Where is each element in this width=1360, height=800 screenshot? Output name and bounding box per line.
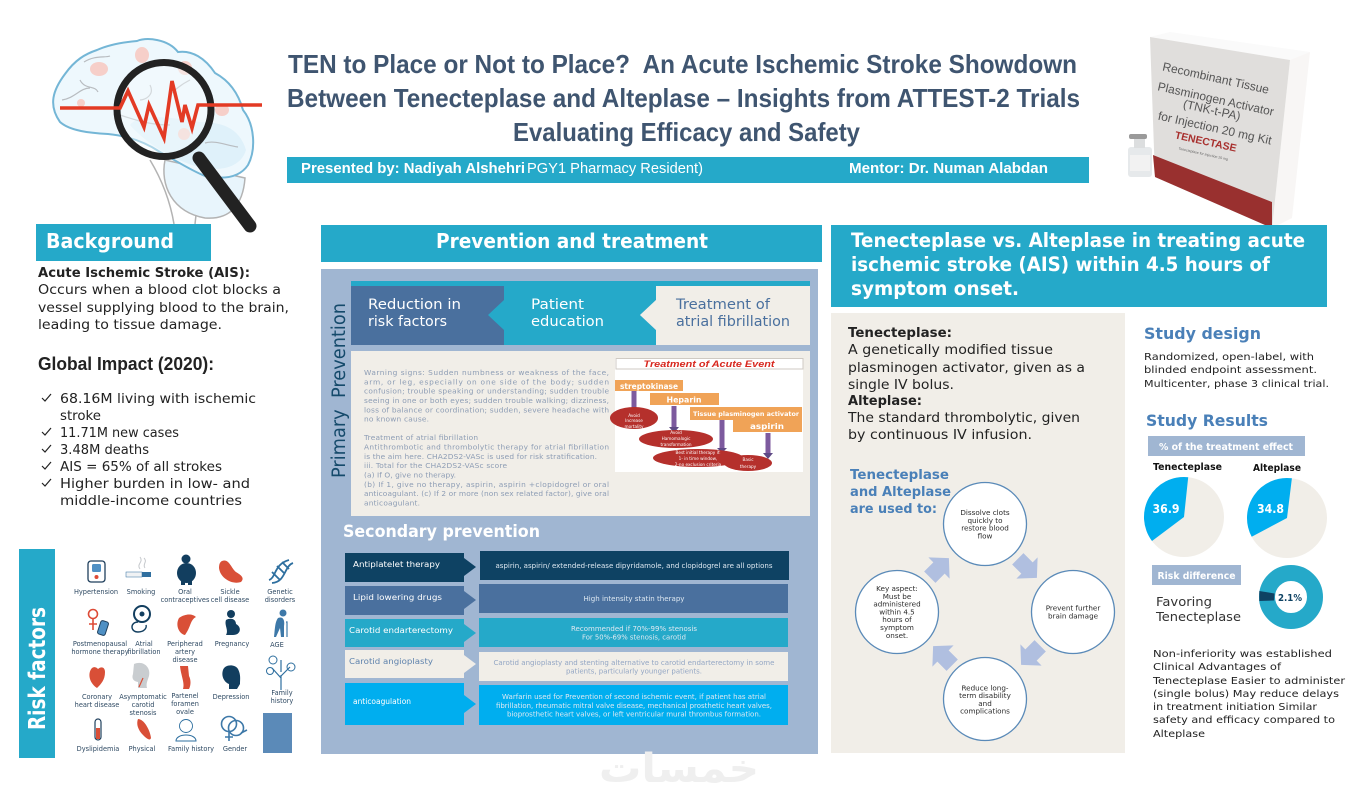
chart: treatment of acute event: Hamomalogic bbox=[662, 436, 691, 441]
circle: reduce disability: and bbox=[978, 699, 992, 708]
icon: family history tree: Family bbox=[271, 689, 293, 697]
primary prevention text box: iii. Total for the CHA2DS2-VASc score bbox=[364, 461, 507, 470]
image: Tenectase medicine box and vial: Plasminogen Activator bbox=[1156, 79, 1275, 119]
circle: key aspect: within 4.5 bbox=[879, 608, 915, 616]
text block: global impact bbox=[38, 354, 256, 509]
panel: prevention bbox=[321, 269, 818, 754]
circle: key aspect: symptom bbox=[880, 623, 914, 632]
icon: oral contraceptives: contraceptives bbox=[161, 596, 210, 604]
row: carotid endarterectomy bbox=[345, 618, 788, 647]
text block: conclusions: Alteplase bbox=[1153, 729, 1205, 740]
icon: pregnancy: Pregnancy bbox=[215, 640, 249, 648]
chart: treatment of acute event: Tissue plasminogen activator bbox=[693, 411, 800, 418]
primary prevention tabs: Treatment of bbox=[675, 297, 771, 313]
text block: drug definitions: plasminogen activator, given as a bbox=[848, 360, 1085, 376]
icon: peripheral artery disease: Peripherad bbox=[167, 640, 203, 648]
label: risk difference: Risk difference bbox=[1158, 571, 1236, 582]
icon: atrial fibrillation bbox=[127, 606, 161, 656]
row: lipid lowering drugs bbox=[345, 584, 788, 615]
row: anticoagulation: bioprosthetic heart valves, or left ventricular mural thrombus formation. bbox=[507, 710, 761, 718]
icon: family history tree: history bbox=[271, 697, 293, 705]
chart: treatment of acute event: transformation bbox=[660, 442, 692, 447]
icon: oral contraceptives bbox=[161, 554, 210, 604]
chart: treatment of acute event: aspirin bbox=[750, 422, 784, 431]
primary prevention text box: (b) If 1, give no therapy, aspirin, aspirin +clopidogrel or oral bbox=[364, 480, 609, 489]
circle: prevent brain damage bbox=[1032, 570, 1114, 654]
heading: used to: Tenecteplase bbox=[850, 467, 949, 483]
chart: treatment of acute event: Best initial therapy if: bbox=[676, 450, 720, 455]
icon: gender: Gender bbox=[223, 745, 247, 753]
heading: prevention and treatment bbox=[321, 225, 822, 262]
label: risk difference bbox=[1152, 565, 1241, 585]
primary prevention text box: is the aim here. CHA2DS2-VASc is used for risk stratification. bbox=[364, 452, 597, 461]
arrow: left to top bbox=[919, 547, 960, 588]
text block: conclusions: Clinical Advantages of bbox=[1153, 662, 1282, 673]
chart: treatment of acute event: Avoid bbox=[670, 430, 682, 435]
row: carotid endarterectomy: Recommended if 70%-99% stenosis bbox=[571, 625, 697, 633]
row: carotid angioplasty: Carotid angioplasty bbox=[349, 657, 433, 666]
icon: patent foramen ovale: ovale bbox=[176, 708, 194, 716]
circle: dissolve clots bbox=[944, 482, 1026, 566]
panel: drug comparison bbox=[831, 313, 1125, 753]
arrow: bottom to left bbox=[922, 635, 963, 676]
row: antiplatelet therapy bbox=[345, 551, 789, 582]
icon: depression: Depression bbox=[213, 693, 249, 701]
icon: physical inactivity: Physical bbox=[129, 745, 156, 753]
chart: treatment of acute event: 1- in time window, bbox=[679, 456, 717, 461]
pie chart: alteplase 34.8: Alteplase bbox=[1253, 463, 1301, 474]
image: Tenectase medicine box and vial: TENECTASE bbox=[1174, 129, 1238, 155]
image: Tenectase medicine box and vial bbox=[1128, 32, 1310, 228]
chart: treatment of acute event: Treatment of Acute Event bbox=[644, 359, 775, 370]
primary prevention text box: loss of balance or coordination; sudden, severe headache with bbox=[364, 405, 609, 414]
icon: peripheral artery disease: artery bbox=[175, 648, 195, 656]
icon: family history group bbox=[168, 720, 214, 753]
image: Tenectase medicine box and vial: Tenecteplase for Injection 20 mg bbox=[1178, 147, 1228, 161]
text block: drug definitions: The standard thrombolytic, given bbox=[847, 410, 1080, 426]
text block: drug definitions: single IV bolus. bbox=[848, 377, 954, 393]
pie chart: alteplase 34.8 bbox=[1247, 463, 1327, 558]
text block: global impact: 11.71M new cases bbox=[60, 425, 179, 441]
image: Tenectase medicine box and vial: (TNK-t-PA) bbox=[1182, 97, 1242, 123]
heading: used to bbox=[850, 467, 951, 517]
icon: sickle cell disease: cell disease bbox=[211, 596, 249, 604]
icon: asymptomatic carotid stenosis: carotid bbox=[132, 701, 154, 709]
row: carotid angioplasty: patients, particularly younger patients. bbox=[566, 668, 702, 676]
primary prevention text box: anticoagulant. bbox=[364, 498, 420, 508]
icon: age: AGE bbox=[270, 641, 284, 649]
heading: tenecteplase vs alteplase bbox=[831, 225, 1327, 307]
presenter and mentor bar: Presented by: Nadiyah Alshehri bbox=[301, 160, 525, 177]
arrow: top to right bbox=[1007, 548, 1048, 589]
icon: depression bbox=[213, 665, 249, 701]
circle: reduce disability: term disability bbox=[959, 691, 1012, 700]
circle: reduce disability: Reduce long- bbox=[962, 684, 1009, 692]
circle: reduce disability bbox=[944, 658, 1026, 740]
circle: key aspect bbox=[856, 570, 938, 654]
text block: global impact: AIS = 65% of all strokes bbox=[60, 459, 222, 475]
icon: physical inactivity bbox=[129, 719, 156, 753]
primary prevention tabs: education bbox=[531, 314, 604, 330]
icon: gender bbox=[222, 716, 247, 753]
icon: smoking: Smoking bbox=[127, 588, 155, 596]
label: treatment effect bbox=[1148, 436, 1305, 456]
chart: treatment of acute event: 2-no exclusion criteria bbox=[675, 462, 722, 467]
text block: drug definitions: A genetically modified tissue bbox=[848, 342, 1053, 358]
row: anticoagulation: fibrillation, rheumatic mitral valve disease, mechanical prosthetic heart valves, bbox=[496, 702, 772, 710]
donut chart: 2.1 percent bbox=[1259, 573, 1315, 621]
icon: genetic disorders bbox=[265, 560, 296, 604]
primary prevention text box: Warning signs: Sudden numbness or weakness of the face, bbox=[364, 368, 609, 377]
text block: conclusions: (single bolus) May reduce delays bbox=[1153, 689, 1339, 700]
risk factors side label: Risk factors bbox=[25, 607, 51, 730]
primary prevention tabs: atrial fibrillation bbox=[676, 314, 790, 330]
icon: family history group: Family history bbox=[168, 745, 214, 753]
icon: asymptomatic carotid stenosis: Asymptomatic bbox=[119, 693, 167, 701]
primary prevention tabs: Patient bbox=[531, 297, 585, 313]
primary prevention tabs bbox=[351, 281, 810, 345]
risk factors side label bbox=[19, 549, 55, 758]
icon: pregnancy bbox=[215, 610, 249, 648]
text: favoring tenecteplase bbox=[1155, 594, 1241, 624]
arrow: right to bottom bbox=[1010, 635, 1051, 676]
primary prevention text box: Antithrombotic and thrombolytic therapy for atrial fibrillation bbox=[364, 442, 609, 452]
chart: treatment of acute event: Heparin bbox=[666, 396, 702, 404]
icon: patent foramen ovale bbox=[171, 666, 199, 716]
primary prevention tabs: risk factors bbox=[368, 314, 447, 330]
label: treatment effect: % of the treatment effect bbox=[1159, 442, 1293, 453]
primary prevention text box: seeing in one or both eyes; sudden trouble walking; dizziness, bbox=[364, 396, 609, 405]
row: antiplatelet therapy: aspirin, aspirin/ extended-release dipyridamole, and clopidogrel are all options bbox=[496, 562, 773, 570]
icon: dyslipidemia bbox=[77, 719, 119, 753]
icon: coronary heart disease: Coronary bbox=[82, 693, 112, 701]
heading: prevention and treatment: Prevention and treatment bbox=[436, 229, 708, 253]
row: carotid angioplasty: Carotid angioplasty and stenting alternative to carotid endarterectomy in some bbox=[494, 659, 774, 667]
section: study design: Multicenter, phase 3 clinical trial. bbox=[1144, 379, 1329, 390]
text block: drug definitions: by continuous IV infusion. bbox=[848, 427, 1032, 443]
section: study results bbox=[1144, 411, 1346, 740]
chart: treatment of acute event: Avoid bbox=[628, 413, 640, 418]
pie chart: tenecteplase 36.9 bbox=[1144, 462, 1224, 557]
primary prevention text box: confusion; trouble speaking or understanding; sudden trouble bbox=[364, 387, 609, 396]
pie chart: tenecteplase 36.9: Tenecteplase bbox=[1153, 462, 1222, 473]
text block: global impact: Global Impact (2020): bbox=[38, 354, 214, 374]
panel: risk factors bbox=[19, 549, 296, 758]
primary prevention tabs: Reduction in bbox=[368, 297, 461, 313]
heading: Background: Background bbox=[46, 229, 174, 253]
text block: conclusions: Tenecteplase Easier to administer bbox=[1152, 676, 1346, 687]
section: study design: Randomized, open-label, with bbox=[1144, 352, 1314, 363]
title: Between Tenecteplase and Alteplase – Insights from ATTEST-2 Trials bbox=[287, 83, 1080, 113]
blue square placeholder bbox=[263, 713, 292, 753]
chart: treatment of acute event bbox=[610, 358, 803, 472]
primary prevention text box: (a) If O, give no therapy. bbox=[364, 470, 456, 480]
icon: family history tree bbox=[266, 656, 295, 705]
circle: key aspect: Must be bbox=[883, 592, 912, 601]
text block: global impact: 68.16M living with ischemic bbox=[60, 391, 256, 407]
chart: treatment of acute event: mortality bbox=[624, 424, 644, 429]
text: favoring tenecteplase: Favoring bbox=[1156, 594, 1212, 609]
icon: postmenopausal hormone therapy bbox=[71, 610, 129, 656]
title bbox=[287, 49, 1080, 147]
text block: conclusions: in treatment initiation Similar bbox=[1153, 702, 1318, 713]
icon: peripheral artery disease bbox=[167, 614, 203, 664]
circle: key aspect: hours of bbox=[882, 615, 912, 624]
icon: patent foramen ovale: Partenel bbox=[171, 692, 199, 700]
text block: drug definitions bbox=[847, 325, 1085, 443]
text block: acute ischemic stroke definition: leading to tissue damage. bbox=[38, 317, 222, 333]
row: lipid lowering drugs: Lipid lowering drugs bbox=[353, 593, 442, 602]
icon: sickle cell disease: Sickle bbox=[220, 588, 240, 596]
heading: Background bbox=[36, 224, 211, 261]
circle: dissolve clots: restore blood bbox=[961, 524, 1009, 532]
icon: postmenopausal hormone therapy: hormone therapy bbox=[71, 648, 129, 656]
text block: acute ischemic stroke definition bbox=[38, 265, 289, 333]
chart: treatment of acute event: streptokinase bbox=[620, 382, 678, 391]
row: carotid endarterectomy: For 50%-69% stenosis, carotid bbox=[582, 634, 686, 642]
icon: patent foramen ovale: foramen bbox=[171, 700, 199, 708]
section: study design: Study design bbox=[1144, 324, 1261, 343]
heading: used to: and Alteplase bbox=[850, 484, 951, 500]
icon: atrial fibrillation: fibrillation bbox=[127, 648, 161, 656]
circle: key aspect: administered bbox=[873, 600, 921, 608]
text block: conclusions: safety and efficacy compared to bbox=[1153, 715, 1335, 726]
title: Evaluating Efficacy and Safety bbox=[513, 117, 860, 147]
icon: genetic disorders: Genetic bbox=[267, 588, 293, 596]
circle: key aspect: onset. bbox=[886, 631, 908, 640]
text block: acute ischemic stroke definition: Occurs when a blood clot blocks a bbox=[38, 282, 281, 298]
row: anticoagulation: Warfarin used for Prevention of second ischemic event, if patient has atrial bbox=[502, 693, 766, 701]
icon: sickle cell disease bbox=[211, 560, 249, 604]
presenter and mentor bar: PGY1 Pharmacy Resident) bbox=[527, 160, 703, 177]
icon: smoking bbox=[126, 557, 155, 596]
icon: asymptomatic carotid stenosis bbox=[119, 663, 167, 717]
section: study design: blinded endpoint assessment. bbox=[1144, 365, 1317, 376]
icon: dyslipidemia: Dyslipidemia bbox=[77, 745, 119, 753]
icon: age bbox=[270, 610, 287, 649]
primary prevention text box: no known cause. bbox=[364, 415, 429, 424]
icon: oral contraceptives: Oral bbox=[178, 588, 192, 596]
icon: hypertension: Hypertension bbox=[74, 588, 118, 596]
primary prevention vertical label: Primary Prevention bbox=[329, 303, 350, 478]
image: Tenectase medicine box and vial: Recombinant Tissue bbox=[1161, 59, 1271, 97]
row: lipid lowering drugs: High intensity statin therapy bbox=[584, 595, 684, 603]
circle: dissolve clots: Dissolve clots bbox=[960, 508, 1010, 517]
circle: key aspect: Key aspect: bbox=[876, 584, 918, 593]
row: antiplatelet therapy: Antiplatelet therapy bbox=[353, 560, 440, 569]
text block: drug definitions: Alteplase: bbox=[848, 393, 922, 409]
text block: global impact: Higher burden in low- and bbox=[60, 476, 250, 492]
circle: prevent brain damage: brain damage bbox=[1048, 612, 1099, 620]
icon: coronary heart disease bbox=[75, 667, 119, 709]
chart: treatment of acute event: Basic bbox=[742, 457, 754, 462]
pie chart: tenecteplase 36.9: 36.9 bbox=[1152, 501, 1180, 516]
heading: study results: Study Results bbox=[1146, 411, 1268, 430]
pie chart: alteplase 34.8: 34.8 bbox=[1257, 501, 1284, 516]
presenter and mentor bar: Mentor: Dr. Numan Alabdan bbox=[849, 160, 1048, 177]
title: TEN to Place or Not to Place? An Acute Ischemic Stroke Showdown bbox=[288, 49, 1077, 79]
heading: secondary prevention: Secondary prevention bbox=[343, 522, 540, 541]
row: carotid angioplasty bbox=[345, 650, 788, 681]
primary prevention text box: Treatment of atrial fibrillation bbox=[363, 433, 478, 442]
icon: brain with magnifying glass bbox=[53, 39, 262, 226]
text: favoring tenecteplase: Tenecteplase bbox=[1155, 609, 1241, 624]
text block: global impact: middle-income countries bbox=[60, 493, 242, 509]
primary prevention text box bbox=[351, 351, 810, 516]
icon: hypertension bbox=[74, 561, 118, 596]
watermark: خمسات bbox=[599, 746, 759, 792]
heading: tenecteplase vs alteplase: ischemic stroke (AIS) within 4.5 hours of bbox=[851, 253, 1270, 276]
section: study design bbox=[1144, 324, 1329, 390]
circle: dissolve clots: flow bbox=[978, 532, 993, 540]
text block: conclusions: Non-inferiority was established bbox=[1153, 649, 1332, 660]
icon: coronary heart disease: heart disease bbox=[75, 701, 119, 709]
primary prevention text box: anticoagulant. (c) If 2 or more (non sex related factor), give oral bbox=[364, 489, 609, 498]
icon: genetic disorders: disorders bbox=[265, 596, 296, 604]
heading: used to: are used to: bbox=[850, 501, 937, 517]
text block: drug definitions: Tenecteplase: bbox=[848, 325, 952, 341]
text block: global impact: stroke bbox=[60, 408, 101, 424]
heading: tenecteplase vs alteplase: symptom onset. bbox=[851, 277, 1019, 300]
primary prevention text box: arm, or leg, especially on one side of the body; sudden bbox=[364, 377, 609, 386]
icon: postmenopausal hormone therapy: Postmenopausal bbox=[73, 640, 127, 648]
row: anticoagulation bbox=[345, 683, 788, 725]
image: Tenectase medicine box and vial: for Injection 20 mg Kit bbox=[1157, 109, 1274, 148]
circle: reduce disability: complications bbox=[960, 706, 1010, 716]
text block: acute ischemic stroke definition: vessel supplying blood to the brain, bbox=[38, 300, 289, 316]
circle: dissolve clots: quickly to bbox=[968, 516, 1002, 525]
icon: atrial fibrillation: Atrial bbox=[135, 640, 153, 648]
donut chart: 2.1 percent: 2.1% bbox=[1278, 593, 1302, 604]
row: anticoagulation: anticoagulation bbox=[353, 697, 411, 706]
row: carotid endarterectomy: Carotid endarterectomy bbox=[349, 626, 453, 635]
text block: global impact: 3.48M deaths bbox=[60, 442, 149, 458]
text block: acute ischemic stroke definition: Acute Ischemic Stroke (AIS): bbox=[38, 265, 250, 281]
chart: treatment of acute event: Increase bbox=[625, 418, 643, 423]
presenter and mentor bar bbox=[287, 157, 1089, 183]
text block: conclusions bbox=[1152, 649, 1346, 740]
icon: asymptomatic carotid stenosis: stenosis bbox=[130, 709, 157, 717]
circle: prevent brain damage: Prevent further bbox=[1046, 604, 1100, 612]
heading: tenecteplase vs alteplase: Tenecteplase vs. Alteplase in treating acute bbox=[851, 229, 1305, 252]
icon: peripheral artery disease: disease bbox=[172, 656, 198, 664]
chart: treatment of acute event: therapy bbox=[740, 464, 757, 469]
